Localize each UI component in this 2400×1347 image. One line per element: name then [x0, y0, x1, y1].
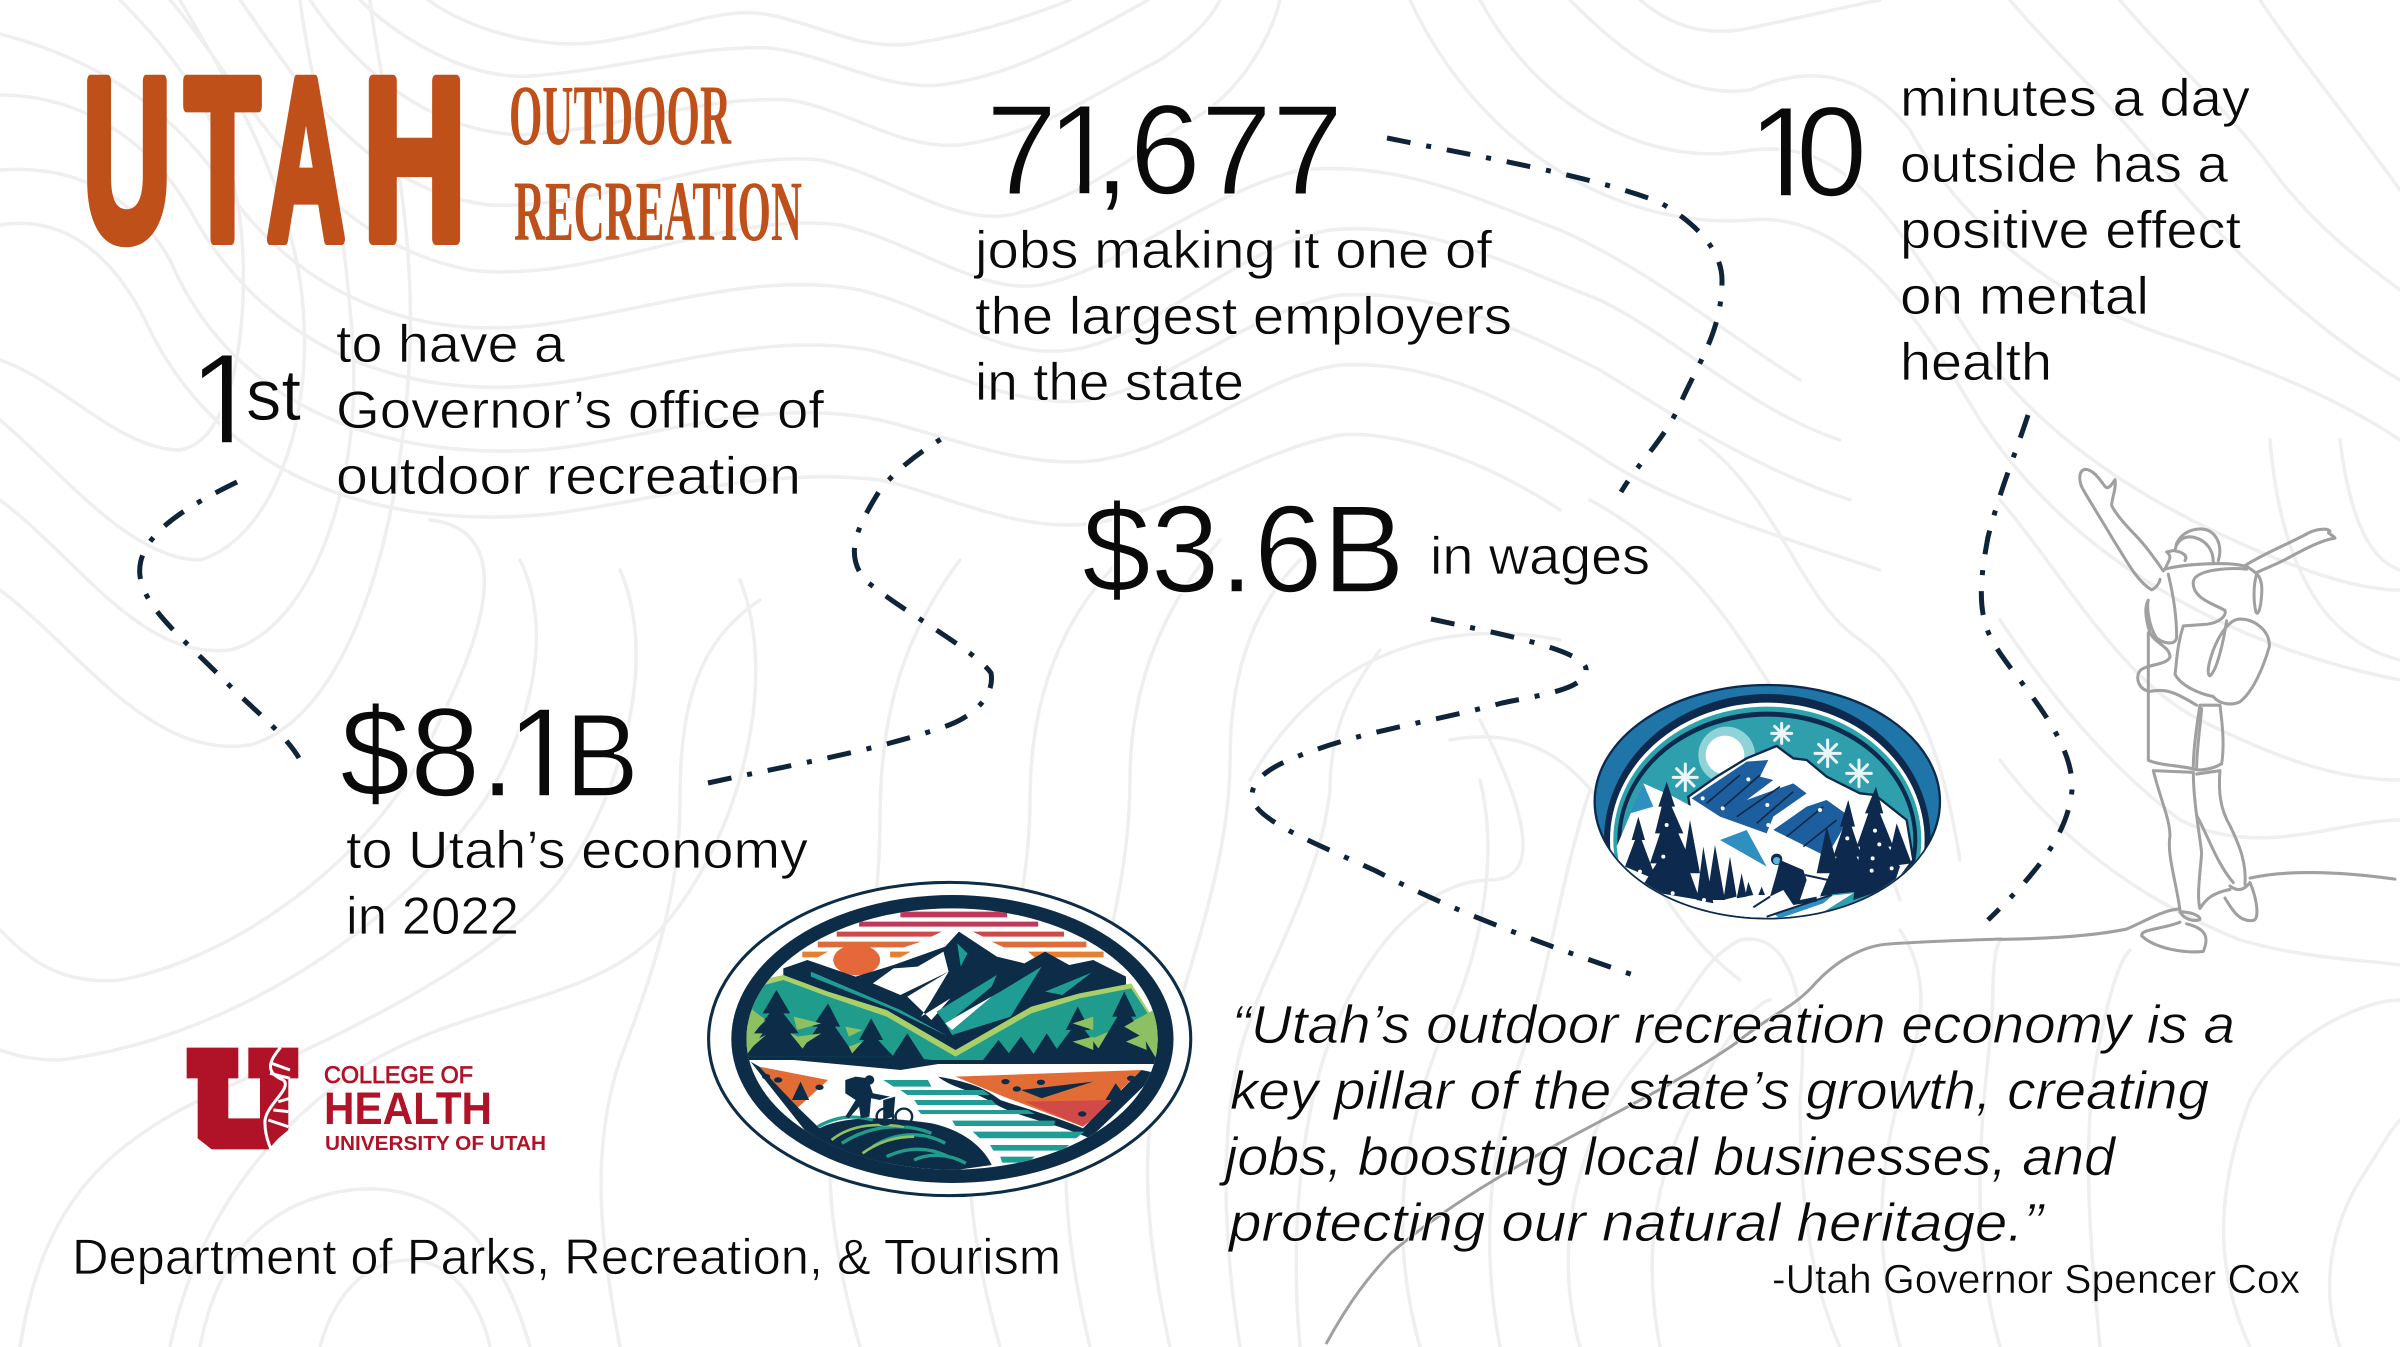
stat: 1st governor's office: Governor’s office of: [336, 381, 824, 440]
stat: 1st governor's office: [202, 324, 824, 495]
stat: 71,677 jobs: ,677: [1094, 79, 1343, 222]
stat: $8.1B to Utah's economy: [342, 704, 808, 934]
subtitle: outdoor recreation: OUTDOOR: [509, 67, 731, 163]
stat: 1st governor's office: to have a: [336, 315, 566, 374]
stat: $3.6B in wages: [1082, 481, 1650, 619]
title: UTAH: A: [267, 31, 345, 288]
stat: 10 minutes a day: minutes a day: [1900, 69, 2251, 128]
stat: 10 minutes a day: health: [1900, 333, 2052, 392]
department credit: Department of Parks, Recreation, & Tourism: [72, 1229, 1061, 1285]
logo: University of Utah College of Health: UNIVERSITY OF UTAH: [325, 1133, 546, 1155]
subtitle: outdoor recreation: [509, 67, 802, 259]
stat: 71,677 jobs: the largest employers: [975, 287, 1512, 346]
stat: $8.1B to Utah's economy: 1: [507, 682, 577, 823]
logo: University of Utah College of Health: [187, 1047, 546, 1155]
stat: 10 minutes a day: outside has a: [1900, 135, 2229, 194]
stat: $3.6B in wages: in wages: [1430, 527, 1650, 586]
stat: 71,677 jobs: jobs making it one of: [973, 221, 1492, 280]
stat: 71,677 jobs: 1: [1047, 79, 1118, 222]
quote: “Utah’s outdoor recreation economy is a: [1232, 995, 2235, 1055]
stat: $8.1B to Utah's economy: to Utah’s economy: [346, 821, 809, 880]
dotted trail: 10 to hiker: [1981, 415, 2072, 920]
stat: 10 minutes a day: on mental: [1900, 267, 2149, 326]
stat: $8.1B to Utah's economy: in 2022: [346, 887, 519, 946]
icon: mountain river badge: [709, 882, 1191, 1196]
quote attribution: -Utah Governor Spencer Cox: [1772, 1256, 2300, 1302]
dotted trail: $8.1B to 71,677: [708, 432, 992, 783]
dotted trail: 71,677 to $3.6B: [1387, 138, 1722, 492]
title: UTAH: U: [83, 31, 171, 288]
stat: 71,677 jobs: [973, 105, 1510, 401]
icon: ski mountain badge: [1594, 684, 1942, 920]
stat: 1st governor's office: st: [246, 356, 301, 436]
stat: 71,677 jobs: in the state: [975, 353, 1244, 412]
logo: University of Utah College of Health: HEALTH: [324, 1083, 492, 1134]
stat: $8.1B to Utah's economy: $8.: [340, 682, 515, 823]
stat: 10 minutes a day: 1: [1748, 81, 1819, 224]
infographic canvas: RECREATION: [514, 163, 802, 259]
title: UTAH: T: [185, 31, 260, 288]
stat: 10 minutes a day: positive effect: [1900, 201, 2241, 260]
quote: protecting our natural heritage.”: [1227, 1193, 2045, 1253]
logo: University of Utah College of Health: COLLEGE OF: [324, 1062, 473, 1089]
stat: 1st governor's office: outdoor recreation: [336, 447, 801, 506]
ground line: [1326, 939, 2002, 1344]
stat: 71,677 jobs: 7: [986, 79, 1057, 222]
stat: $8.1B to Utah's economy: B: [565, 690, 639, 822]
stat: 10 minutes a day: 0: [1796, 81, 1867, 224]
stat: $3.6B in wages: $3.6B: [1082, 481, 1405, 619]
icon: hiker line drawing: [2000, 469, 2395, 952]
stat: 1st governor's office: 1: [189, 328, 260, 471]
dotted trail: 1st to $8.1B: [140, 482, 299, 758]
quote: [1218, 995, 2235, 1253]
dotted trail: $3.6B to quote: [1252, 619, 1642, 978]
title: UTAH: H: [363, 31, 466, 288]
quote: jobs, boosting local businesses, and: [1218, 1127, 2117, 1187]
stat: 10 minutes a day: [1748, 69, 2251, 392]
quote: key pillar of the state’s growth, creating: [1230, 1061, 2209, 1121]
